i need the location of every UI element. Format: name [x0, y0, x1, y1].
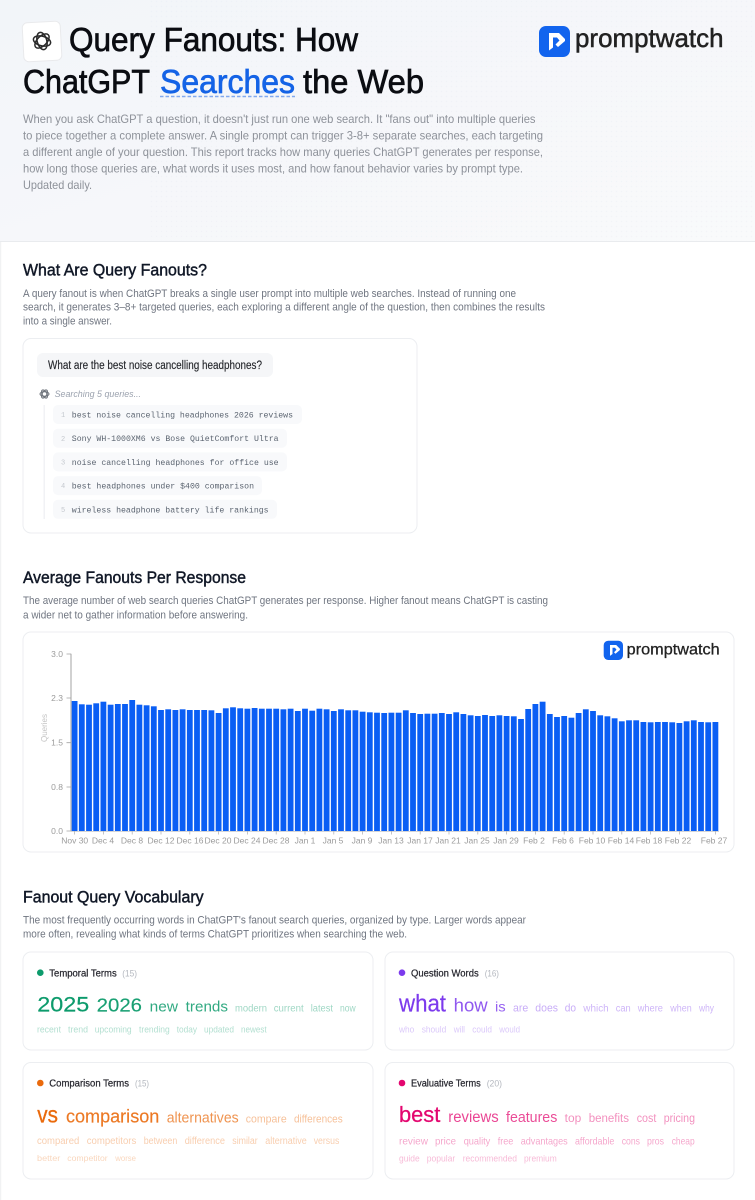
y axis: 2.3: [51, 693, 63, 703]
query list: best noise cancelling headphones 2026 reviews: [72, 410, 293, 420]
panel: Comparison Terms: alternative: [265, 1136, 307, 1147]
panel: Question Words: does: [535, 1003, 558, 1015]
panel: example query fanout: [23, 338, 417, 533]
x axis: Dec 24: [234, 836, 261, 846]
panel: Evaluative Terms: guide: [399, 1154, 420, 1164]
y axis: 1.5: [51, 738, 63, 748]
query list: 2: [61, 436, 65, 444]
x axis: Feb 14: [608, 836, 635, 846]
panel: Evaluative Terms: premium: [524, 1154, 557, 1164]
x axis: Jan 29: [493, 836, 519, 846]
x axis: Feb 6: [552, 836, 574, 846]
panel: Comparison Terms: vs: [37, 1102, 58, 1128]
x axis: Dec 28: [263, 836, 290, 846]
x axis: Jan 21: [435, 836, 461, 846]
bars: [72, 700, 718, 831]
logo: promptwatch: promptwatch: [575, 23, 724, 53]
panel: Temporal Terms: Temporal Terms: [49, 967, 117, 979]
text: fanout definition: into a single answer.: [23, 315, 112, 327]
text: vocabulary description: [23, 914, 526, 941]
panel: Question Words: how: [454, 995, 488, 1016]
heading: Fanout Query Vocabulary: Fanout Query Vocabulary: [23, 888, 204, 906]
searching status: Searching 5 queries...: [55, 389, 141, 400]
logo: promptwatch small: promptwatch: [627, 642, 720, 658]
title: Searches: [160, 63, 295, 100]
panel: Question Words: what: [398, 991, 446, 1018]
query list: 4: [61, 483, 65, 491]
intro paragraph: [23, 112, 543, 192]
panel: Temporal Terms: 2026: [97, 996, 142, 1016]
text: fanout definition: A query fanout is when ChatGPT breaks a single user prompt into multiple web searches. Instead of running one: [23, 288, 516, 300]
title: Query Fanouts: How: [69, 21, 358, 58]
x axis: Nov 30: [61, 836, 88, 846]
panel: Comparison Terms: differences: [294, 1114, 343, 1126]
panel: Comparison Terms: (15): [135, 1079, 149, 1090]
query list: noise cancelling headphones for office use: [72, 458, 279, 468]
x axis: Jan 25: [464, 836, 490, 846]
y axis: Queries: [40, 714, 49, 742]
y axis: 0.8: [51, 782, 63, 792]
panel: Temporal Terms: 2025: [37, 993, 89, 1017]
text: average fanouts description: The average number of web search queries ChatGPT generates per response. Higher fanout means ChatGPT is casting: [23, 595, 548, 607]
panel: Question Words: could: [472, 1025, 492, 1035]
panel: Temporal Terms: trending: [139, 1025, 170, 1035]
panel: Comparison Terms: Comparison Terms: [49, 1078, 129, 1090]
y axis: [40, 649, 71, 836]
x axis: Feb 2: [523, 836, 545, 846]
panel: Question Words: Question Words: [411, 967, 479, 979]
panel: Comparison Terms: difference: [185, 1136, 225, 1147]
panel: Question Words: is: [495, 999, 506, 1015]
panel: Evaluative Terms: benefits: [589, 1113, 629, 1125]
x axis: Feb 10: [579, 836, 606, 846]
intro paragraph: to piece together a complete answer. A single prompt can trigger 3-8+ separate searches, each targeting: [23, 128, 543, 142]
intro paragraph: When you ask ChatGPT a question, it doesn't just run one web search. It "fans out" into multiple queries: [23, 112, 536, 126]
panel: Question Words: who: [398, 1025, 414, 1035]
panel: Question Words: are: [513, 1003, 528, 1015]
panel: Question Words: [385, 952, 734, 1050]
panel: Evaluative Terms: advantages: [521, 1136, 568, 1148]
panel: Evaluative Terms: review: [399, 1136, 428, 1148]
panel: Question Words: should: [422, 1025, 446, 1035]
panel: Comparison Terms: versus: [314, 1136, 339, 1147]
x axis: Dec 8: [121, 836, 143, 846]
panel: Comparison Terms: comparison: [66, 1106, 159, 1126]
panel: Evaluative Terms: cost: [637, 1113, 657, 1125]
panel: Evaluative Terms: reviews: [448, 1109, 499, 1126]
panel: Temporal Terms: current: [274, 1004, 304, 1015]
text: fanout definition: search, it generates 3–8+ targeted queries, each exploring a different angle of the question, then combines the results: [23, 302, 545, 314]
x axis: Jan 5: [323, 836, 344, 846]
panel: Evaluative Terms: affordable: [575, 1136, 614, 1148]
x axis: Feb 18: [636, 836, 663, 846]
panel: Evaluative Terms: cons: [622, 1136, 640, 1148]
panel: Temporal Terms: trends: [186, 999, 228, 1016]
panel: Question Words: do: [565, 1003, 576, 1015]
panel: Comparison Terms: compare: [246, 1114, 287, 1126]
panel: Comparison Terms: competitors: [87, 1136, 136, 1147]
panel: Question Words: when: [669, 1004, 692, 1015]
panel: Question Words: why: [698, 1004, 714, 1015]
panel: Evaluative Terms: Evaluative Terms: [411, 1078, 481, 1090]
query list: 5: [61, 507, 65, 515]
x axis: Jan 1: [295, 836, 316, 846]
panel: Evaluative Terms: pros: [647, 1136, 664, 1148]
title: ChatGPT: [23, 63, 150, 100]
panel: Question Words: where: [637, 1004, 663, 1015]
query list: Sony WH-1000XM6 vs Bose QuietComfort Ultra: [72, 434, 279, 444]
panel: Temporal Terms: trend: [68, 1025, 88, 1035]
panel: bar chart card: [23, 632, 734, 852]
panel: Evaluative Terms: free: [498, 1136, 513, 1148]
heading: Average Fanouts Per Response: Average Fanouts Per Response: [23, 569, 246, 587]
text: average fanouts description: a wider net to gather information before answering.: [23, 610, 248, 622]
panel: Temporal Terms: latest: [311, 1004, 333, 1015]
title: [23, 21, 424, 100]
panel: Temporal Terms: now: [340, 1004, 356, 1015]
x axis: Feb 22: [665, 836, 692, 846]
panel: Question Words: which: [582, 1004, 609, 1015]
header panel: [0, 0, 755, 242]
panel: Evaluative Terms: best: [399, 1102, 441, 1127]
x axis: Jan 9: [352, 836, 373, 846]
x axis: Jan 17: [407, 836, 433, 846]
panel: Evaluative Terms: pricing: [664, 1113, 695, 1125]
panel: Temporal Terms: updated: [204, 1025, 234, 1035]
y axis: 3.0: [51, 649, 63, 659]
panel: Question Words: would: [498, 1025, 520, 1035]
intro paragraph: how long those queries are, what words it uses most, and how fanout behavior varies by prompt type.: [23, 162, 523, 176]
heading: What Are Query Fanouts?: What Are Query Fanouts?: [23, 262, 207, 280]
panel: Comparison Terms: between: [144, 1136, 177, 1147]
panel: Question Words: (16): [485, 968, 499, 979]
panel: Evaluative Terms: cheap: [672, 1136, 695, 1148]
panel: Temporal Terms: (15): [122, 968, 137, 979]
panel: Evaluative Terms: price: [435, 1136, 456, 1148]
panel: Comparison Terms: worse: [114, 1153, 136, 1163]
x axis: Dec 12: [148, 836, 175, 846]
text: fanout definition: [23, 288, 545, 327]
query list: 1: [61, 412, 65, 420]
panel: Temporal Terms: upcoming: [95, 1025, 132, 1035]
query list: 3: [61, 460, 65, 468]
panel: Evaluative Terms: recommended: [463, 1154, 517, 1164]
panel: Comparison Terms: similar: [232, 1136, 258, 1147]
panel: Evaluative Terms: [385, 1062, 734, 1179]
panel: Temporal Terms: [23, 952, 373, 1050]
x axis: Jan 13: [378, 836, 404, 846]
panel: Comparison Terms: [23, 1062, 373, 1179]
x axis: [61, 831, 728, 846]
panel: Temporal Terms: new: [150, 999, 178, 1016]
prompt bubble: [37, 353, 273, 377]
panel: Evaluative Terms: (20): [487, 1079, 502, 1090]
x axis: Dec 20: [205, 836, 232, 846]
panel: Question Words: will: [453, 1025, 465, 1035]
panel: Evaluative Terms: popular: [427, 1154, 455, 1164]
intro paragraph: a different angle of your question. This report tracks how many queries ChatGPT generates per response,: [23, 145, 543, 159]
logo: promptwatch small: [604, 641, 720, 660]
icon: ChatGPT logo tile: [22, 21, 62, 62]
x axis: Dec 16: [177, 836, 204, 846]
panel: Comparison Terms: better: [37, 1153, 60, 1163]
title: the Web: [303, 63, 424, 100]
panel: Evaluative Terms: quality: [464, 1136, 491, 1148]
panel: Temporal Terms: recent: [37, 1025, 61, 1035]
query list: best headphones under $400 comparison: [72, 482, 254, 492]
text: average fanouts description: [23, 595, 548, 622]
query list: [44, 405, 302, 519]
panel: Temporal Terms: today: [177, 1025, 197, 1035]
panel: Temporal Terms: modern: [235, 1004, 267, 1015]
panel: Comparison Terms: competitor: [67, 1153, 108, 1163]
x axis: Dec 4: [92, 836, 114, 846]
panel: Question Words: can: [616, 1004, 631, 1015]
text: vocabulary description: more often, revealing what kinds of terms ChatGPT prioritizes when searching the web.: [23, 929, 407, 941]
intro paragraph: Updated daily.: [23, 178, 92, 192]
panel: Comparison Terms: compared: [37, 1136, 79, 1147]
prompt bubble: What are the best noise cancelling headphones?: [48, 360, 262, 372]
panel: Evaluative Terms: top: [565, 1113, 581, 1125]
panel: Evaluative Terms: features: [506, 1110, 557, 1126]
y axis: 0.0: [51, 826, 63, 836]
query list: wireless headphone battery life rankings: [72, 505, 269, 515]
x axis: Feb 27: [701, 836, 728, 846]
panel: Comparison Terms: alternatives: [167, 1110, 239, 1126]
text: vocabulary description: The most frequently occurring words in ChatGPT's fanout search queries, organized by type. Larger words appear: [23, 914, 526, 926]
panel: Temporal Terms: newest: [241, 1025, 267, 1035]
